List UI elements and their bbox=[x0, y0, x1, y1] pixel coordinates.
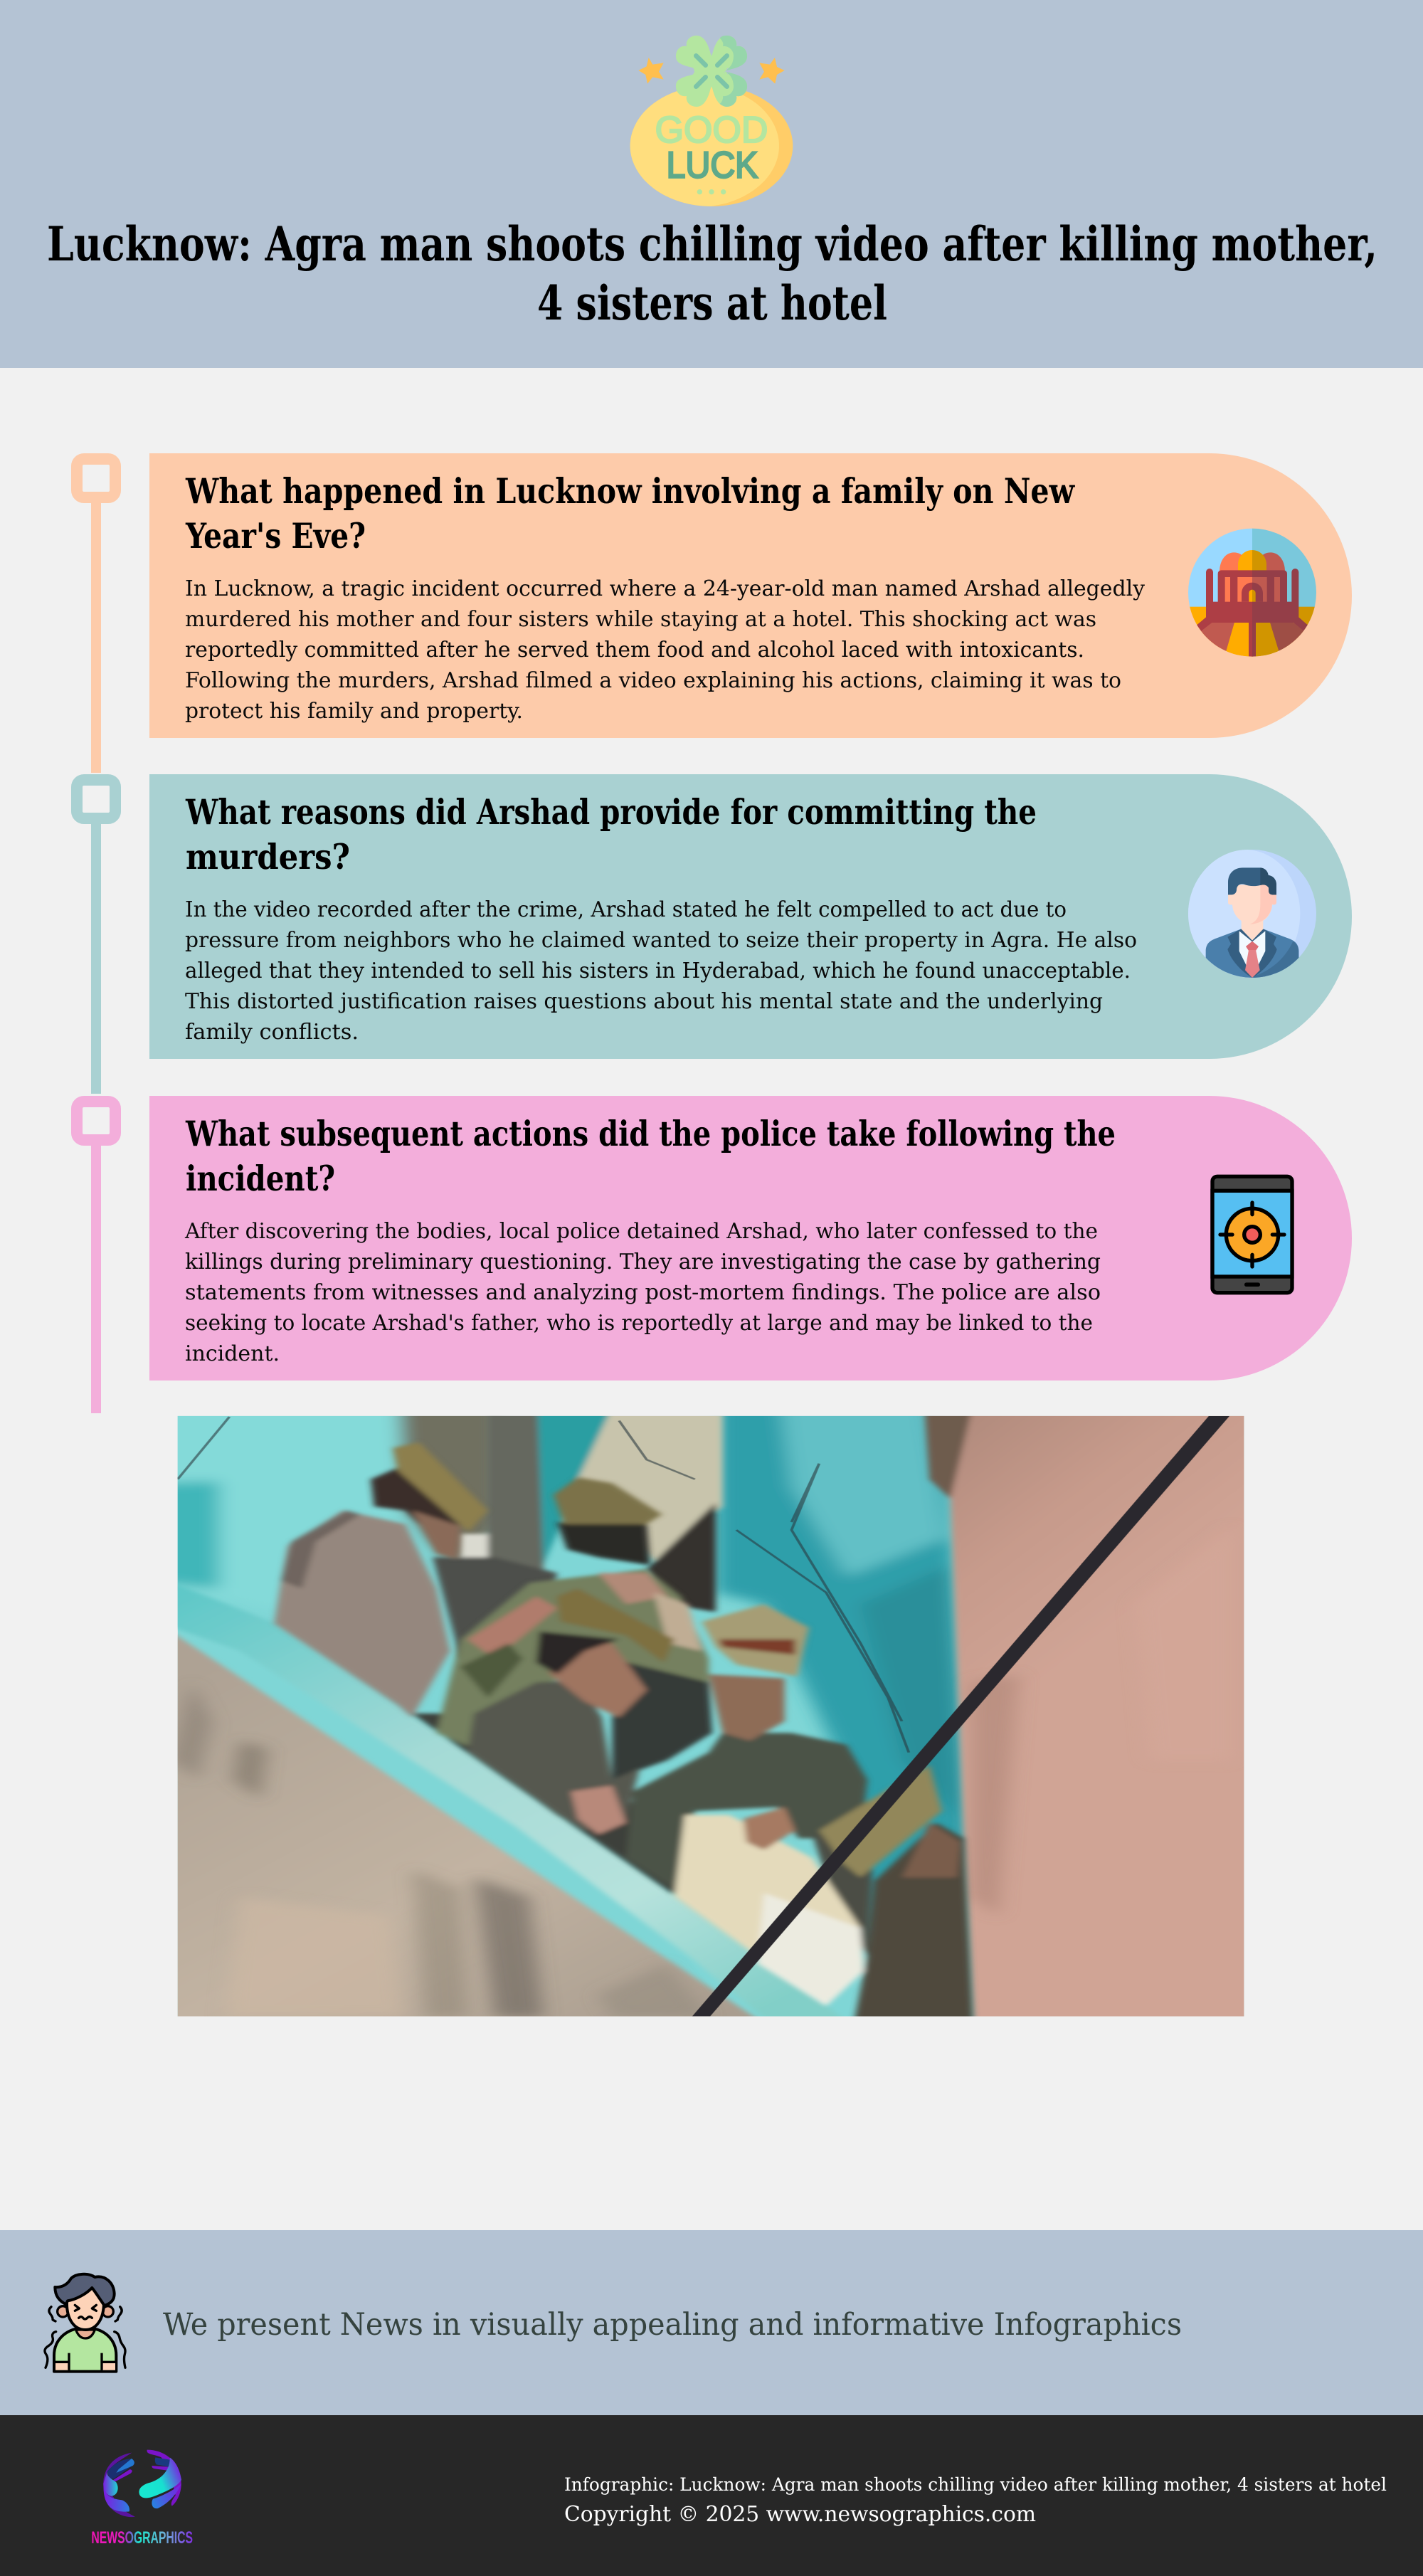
icon: monument bbox=[1186, 527, 1318, 660]
tagline text: We present News in visually appealing and informative Infographics bbox=[163, 2307, 1182, 2343]
panel: what happened bbox=[149, 453, 1352, 738]
icon: good luck badge: LUCK bbox=[667, 145, 758, 186]
title bbox=[47, 216, 1377, 331]
icon: shivering person bbox=[45, 2274, 125, 2372]
heading: police actions: incident? bbox=[186, 1158, 335, 1199]
text: police actions body: After discovering the bodies, local police detained Arshad, who later confessed to the bbox=[184, 1219, 1098, 1244]
logo: newsographics bbox=[91, 2450, 193, 2548]
timeline marker 3 bbox=[77, 1102, 115, 1413]
heading: reasons: What reasons did Arshad provide for committing the bbox=[185, 791, 1037, 833]
text: what happened body: murdered his mother and four sisters while staying at a hotel. This shocking act was bbox=[185, 607, 1096, 632]
text: police actions body: killings during preliminary questioning. They are investigating the case by gathering bbox=[185, 1250, 1101, 1274]
heading: police actions bbox=[185, 1113, 1116, 1199]
heading: reasons bbox=[185, 791, 1037, 877]
icon: good luck badge bbox=[615, 36, 793, 207]
text: police actions body: statements from witnesses and analyzing post-mortem findings. The police are also bbox=[185, 1280, 1101, 1305]
text: reasons body: alleged that they intended to sell his sisters in Hyderabad, which he found unacceptable. bbox=[185, 959, 1131, 983]
text: reasons body: pressure from neighbors who he claimed wanted to seize their property in Agra. He also bbox=[185, 928, 1137, 953]
panel: reasons bbox=[149, 774, 1352, 1059]
footer credit text: Copyright © 2025 www.newsographics.com bbox=[564, 2502, 1036, 2527]
text: police actions body: seeking to locate Arshad's father, who is reportedly at large and may be linked to the bbox=[185, 1311, 1093, 1336]
text: police actions body: incident. bbox=[185, 1341, 280, 1366]
text: what happened body: protect his family and property. bbox=[185, 699, 523, 724]
heading: what happened bbox=[185, 470, 1075, 556]
heading: police actions: What subsequent actions did the police take following the bbox=[185, 1113, 1116, 1154]
footer tagline band bbox=[0, 2230, 1423, 2415]
heading: what happened: What happened in Lucknow involving a family on New bbox=[185, 470, 1075, 512]
text: police actions body bbox=[184, 1219, 1101, 1366]
icon: phone target bbox=[1212, 1176, 1292, 1293]
footer dark band bbox=[0, 2415, 1423, 2576]
icon: good luck badge: GOOD bbox=[655, 110, 768, 151]
heading: what happened: Year's Eve? bbox=[185, 515, 366, 556]
text: reasons body bbox=[185, 897, 1137, 1045]
logo: newsographics: NEWSOGRAPHICS bbox=[91, 2528, 193, 2548]
timeline marker 2 bbox=[77, 780, 115, 1094]
text: reasons body: In the video recorded after the crime, Arshad stated he felt compelled to act due to bbox=[185, 897, 1067, 922]
photo: police officers carrying a bundle bbox=[178, 1416, 1244, 2017]
panel: police actions bbox=[149, 1096, 1352, 1381]
text: what happened body: reportedly committed after he served them food and alcohol laced with intoxicants. bbox=[185, 638, 1084, 663]
text: what happened body bbox=[185, 576, 1146, 724]
icon: man in suit bbox=[1188, 850, 1316, 980]
timeline marker 1 bbox=[77, 459, 115, 773]
text: reasons body: family conflicts. bbox=[185, 1020, 359, 1045]
footer credit text bbox=[564, 2474, 1387, 2527]
header panel bbox=[0, 0, 1423, 368]
text: reasons body: This distorted justification raises questions about his mental state and the underlying bbox=[185, 989, 1103, 1014]
text: what happened body: Following the murders, Arshad filmed a video explaining his actions, claiming it was to bbox=[185, 668, 1121, 693]
text: what happened body: In Lucknow, a tragic incident occurred where a 24-year-old man named Arshad allegedly bbox=[185, 576, 1146, 601]
heading: reasons: murders? bbox=[186, 836, 350, 877]
title: 4 sisters at hotel bbox=[537, 275, 887, 331]
footer credit text: Infographic: Lucknow: Agra man shoots chilling video after killing mother, 4 sisters at hotel bbox=[564, 2474, 1387, 2495]
